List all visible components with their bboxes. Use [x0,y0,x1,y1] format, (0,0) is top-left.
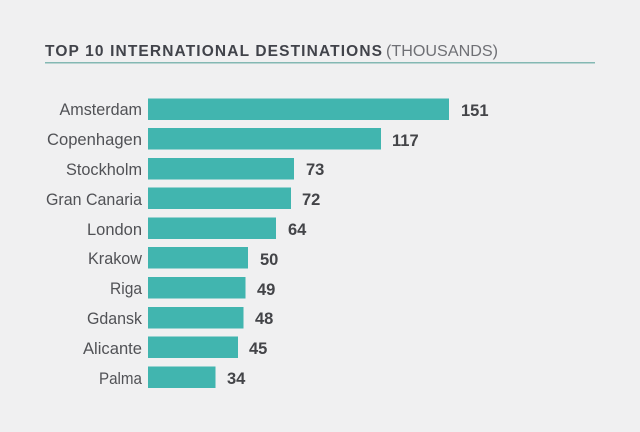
bar chart [46,98,489,388]
row: Gran Canaria: Gran Canaria [46,191,143,209]
row: Alicante [83,336,267,358]
row: London: London [87,221,142,239]
row: Riga [110,277,275,299]
row: Amsterdam [60,98,489,120]
title: TOP 10 INTERNATIONAL DESTINATIONS [45,43,382,60]
row: Amsterdam: 151 [461,102,489,120]
row: London [87,218,307,239]
row: London: 64 [288,221,307,239]
row: Palma [99,366,246,388]
row: Gdansk: Gdansk [87,310,143,328]
row: Copenhagen: 117 [392,132,419,150]
row: Krakow: Krakow [88,250,142,268]
row: Gdansk [87,307,273,328]
title: (THOUSANDS) [386,43,498,60]
row: Stockholm: Stockholm [66,161,142,179]
row: Gdansk: 48 [255,310,273,328]
row: Amsterdam: Amsterdam [60,101,142,119]
row: Copenhagen [47,128,419,150]
row: Krakow [88,247,278,269]
row: Stockholm: 73 [306,161,324,179]
row: Gran Canaria [46,188,320,209]
row: Alicante: 45 [249,340,267,358]
row: Riga: Riga [110,280,143,298]
row: Palma: 34 [227,370,246,388]
row: Palma: Palma [99,370,143,388]
row: Alicante: Alicante [83,340,142,358]
row: Riga: 49 [257,281,275,299]
row: Krakow: 50 [260,251,278,269]
row: Gran Canaria: 72 [302,191,320,209]
row: Copenhagen: Copenhagen [47,131,142,149]
row: Stockholm [66,158,324,180]
